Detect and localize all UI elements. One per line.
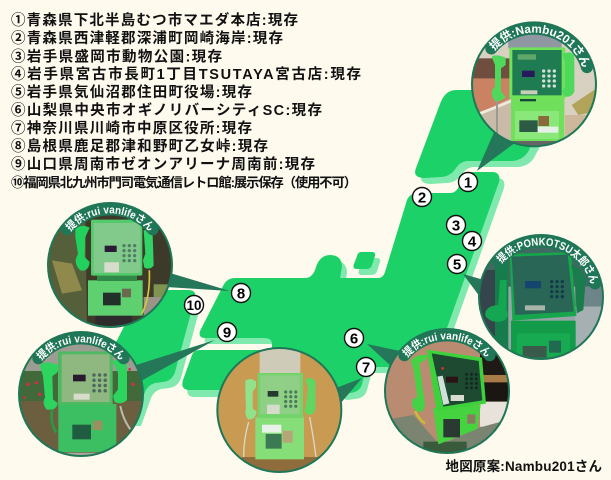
phone lower plate: [515, 111, 559, 139]
phone panel: [260, 375, 300, 414]
badge 9: [218, 322, 236, 342]
photo scene 7: [218, 349, 340, 471]
photo 1: Nambu201: [471, 21, 597, 148]
handset right: [562, 52, 574, 97]
list item 1: ①青森県下北半島むつ市マエダ本店:現存: [11, 11, 298, 29]
phone lower box: [433, 405, 481, 444]
photo border 7: [217, 348, 341, 472]
pointer 8: [166, 273, 230, 291]
Shikoku: [182, 350, 300, 390]
phone upper frame: [510, 252, 576, 321]
badge 2: 2: [418, 190, 426, 206]
list item 4: ④岩手県宮古市長町1丁目TSUTAYA宮古店:現存: [11, 65, 361, 83]
badge 4: [462, 232, 482, 250]
list item 9: ⑨山口県周南市ゼオンアリーナ周南前:現存: [11, 155, 315, 173]
list item 2: ②青森県西津軽郡深浦町岡崎海岸:現存: [11, 29, 283, 47]
photo 8: rui vanlife: [47, 202, 173, 328]
badge 4: 4: [468, 234, 477, 250]
photo 6: rui vanlife: [384, 328, 510, 454]
number badges: [184, 172, 482, 376]
credit band 5: [498, 241, 595, 284]
map of Japan: [90, 90, 546, 426]
handset right: [143, 230, 154, 269]
badge 2: [412, 188, 432, 206]
photo scene 1: [473, 34, 595, 146]
handset right: [571, 265, 586, 313]
photo scene 8: [49, 215, 171, 326]
list item 8: ⑧島根県鹿足郡津和野町乙女峠:現存: [11, 137, 268, 155]
map main landmass: [90, 90, 540, 420]
credit band 6: [404, 335, 490, 355]
credit 9: 提供:rui vanlifeさん: [36, 336, 124, 361]
handset right: [304, 378, 315, 415]
badge 5: [448, 254, 466, 274]
badge 1: 1: [464, 174, 472, 192]
phone panel: [94, 223, 140, 273]
phone dark panel: [512, 255, 574, 315]
badge 9: 9: [223, 324, 231, 342]
list item 5: ⑤岩手県気仙沼郡住田町役場:現存: [11, 83, 252, 101]
photo border 8: [48, 203, 172, 327]
map credit: 地図原案:Nambu201さん: [446, 458, 602, 474]
phone dark panel: [432, 353, 482, 407]
Kyushu: [90, 290, 195, 420]
badge 8: [232, 284, 250, 302]
Honshu: [200, 172, 499, 394]
phone panel: [62, 354, 110, 402]
phone dark panel: [512, 50, 562, 95]
phone lower box: [511, 320, 576, 353]
photo border 6: [385, 329, 509, 453]
handset right: [112, 360, 127, 403]
pointer 9: [136, 340, 215, 381]
pointer 5: [463, 274, 484, 297]
credit 6: 提供:rui vanlifeさん: [402, 332, 490, 358]
credit 8: 提供:rui vanlifeさん: [64, 206, 152, 232]
badge 3: [446, 216, 466, 234]
phone lower box: [255, 417, 304, 459]
Hokkaido: [415, 90, 540, 178]
handset left: [40, 362, 58, 410]
phone upper frame: [91, 220, 142, 276]
pointer 6: [367, 344, 405, 367]
badge 7: 7: [362, 360, 370, 376]
photo border 5: [479, 235, 603, 359]
connector pointers: [136, 130, 516, 404]
badge 1: [458, 172, 478, 192]
handset left: [492, 55, 506, 101]
badge 6: [344, 328, 364, 348]
phone upper frame: [258, 373, 303, 418]
badge 3: 3: [452, 218, 460, 234]
phone lower box: [58, 404, 116, 452]
photo 5: PONKOTSU: [478, 234, 604, 360]
phone upper frame: [58, 351, 113, 405]
handset left: [245, 379, 257, 419]
photo scene 5: [480, 247, 602, 358]
phone lower box: [511, 98, 564, 141]
badge 10: 10: [186, 298, 202, 313]
list item 7: ⑦神奈川県川崎市中原区役所:現存: [11, 119, 252, 137]
location list: [11, 11, 361, 190]
photo border 1: [472, 22, 596, 146]
credit band 1: [491, 29, 587, 67]
photo 7: no credit: [216, 347, 342, 473]
Sado island: [353, 252, 375, 269]
credit band 8: [67, 209, 153, 229]
credit band 9: [38, 338, 124, 358]
map shadow: [96, 96, 546, 426]
handset: [411, 355, 428, 412]
phone upper frame: [427, 350, 486, 411]
handset left: [485, 280, 508, 322]
pointer 1: [477, 130, 516, 171]
badge 10: [184, 296, 204, 314]
badge 7: [356, 358, 376, 376]
badge 8: 8: [237, 286, 245, 302]
list item 10: ⑩福岡県北九州市門司電気通信レトロ館:展示保存（使用不可）: [11, 174, 357, 190]
photo 9: rui vanlife: [18, 331, 144, 457]
photo border 9: [19, 332, 143, 456]
list item 3: ③岩手県盛岡市動物公園:現存: [11, 48, 222, 66]
credit 1: 提供:Nambu201さん: [488, 25, 590, 67]
phone lower box: [88, 280, 143, 316]
badge 5: 5: [453, 256, 461, 274]
photo scene 9: [20, 344, 142, 455]
handset left: [75, 226, 90, 271]
credit 5: 提供:PONKOTSU太郎さん: [496, 238, 598, 284]
badge 6: 6: [350, 330, 358, 348]
list item 6: ⑥山梨県中央市オギノリバーシティSC:現存: [11, 101, 322, 119]
pointer 7: [336, 378, 362, 404]
phone upper frame: [509, 47, 565, 99]
photo scene 6: [386, 341, 508, 452]
